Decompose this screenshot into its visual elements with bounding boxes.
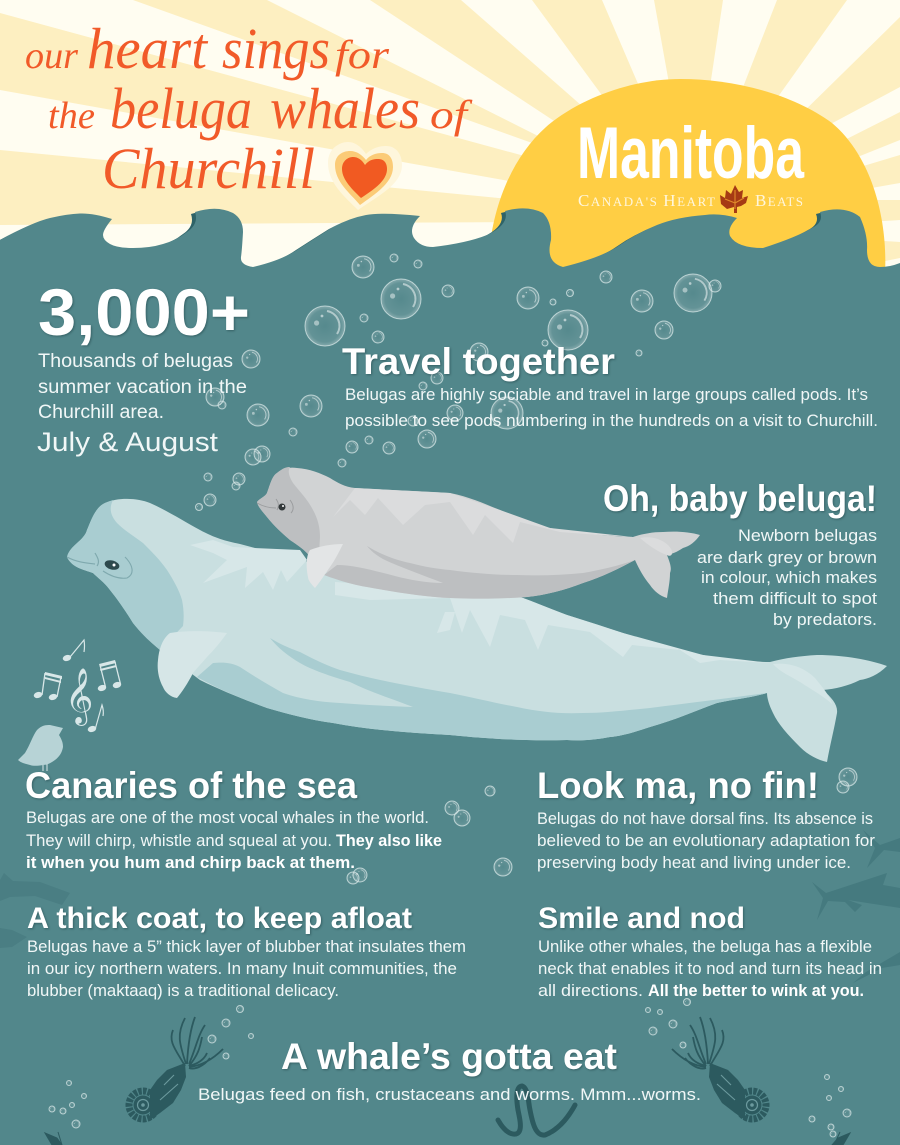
note: left beamed: [33, 672, 62, 701]
stat: 3,000+: [37, 275, 250, 457]
icon: music notes: [33, 640, 122, 733]
whale face: [67, 553, 132, 578]
section: oh, baby beluga: by predators.: [773, 610, 877, 629]
adult beluga whale: [67, 499, 887, 762]
section: smile and nod: Smile and nod: [538, 902, 745, 935]
title: the: [48, 95, 95, 137]
note: top: [62, 640, 84, 662]
whale flipper: [158, 631, 227, 698]
logo tagline: [578, 191, 803, 210]
background sunburst: [0, 0, 900, 310]
sun: [488, 79, 885, 275]
icon: left ammonite: [129, 1017, 223, 1120]
stat: 3,000+: July & August: [37, 427, 219, 457]
stat: 3,000+: Thousands of belugas: [38, 351, 233, 372]
section: look ma, no fin: believed to be an evolutionary adaptation for: [537, 831, 875, 850]
baby flipper: [307, 544, 343, 588]
section: a whale's gotta eat: [198, 1036, 701, 1104]
section: smile and nod: all directions.: [538, 981, 643, 1000]
title: Churchill: [102, 136, 315, 201]
stat: 3,000+: summer vacation in the: [38, 377, 247, 398]
section: canaries of the sea: [25, 765, 442, 872]
logo tagline: BEATS: [755, 191, 803, 210]
section: a whale's gotta eat: A whale’s gotta eat: [281, 1036, 617, 1077]
section: canaries of the sea: Belugas are one of the most vocal whales in the world.: [26, 808, 429, 827]
title: whales: [270, 76, 420, 141]
section: smile and nod: [538, 902, 882, 1000]
section: travel together: Belugas are highly sociable and travel in large groups called pods. It’s: [345, 385, 868, 404]
stat: 3,000+: 3,000+: [38, 275, 250, 349]
icon: worm: [498, 1086, 575, 1135]
section: canaries of the sea: Canaries of the sea: [25, 765, 357, 806]
section: look ma, no fin: [537, 765, 875, 872]
section: oh, baby beluga: them difficult to spot: [713, 589, 877, 608]
whale tail highlight: [773, 664, 832, 704]
section: canaries of the sea: They also like: [336, 831, 442, 850]
section: a whale's gotta eat: Belugas feed on fish, crustaceans and worms. Mmm...worms.: [198, 1085, 701, 1104]
note: low: [87, 705, 103, 733]
section: canaries of the sea: it when you hum and chirp back at them.: [26, 853, 355, 872]
section: smile and nod: neck that enables it to nod and turn its head in: [538, 959, 882, 978]
section: a thick coat: in our icy northern waters. In many Inuit communities, the: [27, 959, 457, 978]
section: oh, baby beluga: Oh, baby beluga!: [603, 478, 877, 519]
note: right beamed: [97, 660, 122, 692]
baby back markings: [333, 488, 633, 543]
section: canaries of the sea: They will chirp, whistle and squeal at you.: [26, 831, 332, 850]
title: of: [430, 92, 473, 137]
title: sings: [222, 16, 330, 81]
whale darker head and belly shading: [67, 500, 184, 650]
section: a thick coat: A thick coat, to keep afloat: [27, 902, 412, 935]
clef: 𝄞: [65, 668, 93, 726]
icon: bottom shrimp right: [832, 1132, 850, 1145]
title: beluga: [110, 76, 252, 141]
baby tail highlight: [640, 537, 672, 556]
section: look ma, no fin: Look ma, no fin!: [537, 765, 819, 806]
section: look ma, no fin: Belugas do not have dorsal fins. Its absence is: [537, 809, 873, 828]
section: a thick coat: [27, 902, 466, 1000]
title: heart: [87, 16, 209, 81]
whale back markings: [190, 540, 770, 663]
section: a thick coat: Belugas have a 5” thick layer of blubber that insulates them: [27, 937, 466, 956]
section: smile and nod: Unlike other whales, the beluga has a flexible: [538, 937, 872, 956]
baby beluga whale: [257, 467, 700, 599]
fish silhouettes: [0, 830, 900, 983]
section: a thick coat: blubber (maktaaq) is a traditional delicacy.: [27, 981, 339, 1000]
icon: bottom shrimp left: [45, 1132, 62, 1145]
icon: heart: [328, 142, 402, 210]
section: oh, baby beluga: in colour, which makes: [701, 568, 877, 587]
section: travel together: possible to see pods numbering in the hundreds on a visit to Churchill.: [345, 411, 878, 430]
section: oh, baby beluga: are dark grey or brown: [697, 548, 877, 567]
title: our: [25, 35, 78, 77]
icon: bird: [18, 725, 63, 771]
section: smile and nod: All the better to wink at you.: [648, 981, 864, 1000]
title: for: [335, 32, 389, 77]
icon: maple leaf: [720, 185, 748, 213]
bubbles: [49, 254, 857, 1137]
section: travel together: [342, 341, 878, 430]
section: look ma, no fin: preserving body heat and living under ice.: [537, 853, 851, 872]
stat: 3,000+: Churchill area.: [38, 402, 164, 423]
section: oh, baby beluga: Newborn belugas: [738, 526, 877, 545]
section: oh, baby beluga: [603, 478, 877, 629]
title: [25, 16, 473, 201]
logo: Manitoba: [577, 113, 805, 213]
baby face: [257, 499, 293, 513]
section: travel together: Travel together: [342, 341, 615, 382]
logo: Manitoba: Manitoba: [577, 113, 805, 194]
baby darker head and belly shading: [257, 467, 320, 570]
logo tagline: CANADA'S HEART: [578, 191, 715, 210]
icon: right ammonite: [672, 1017, 766, 1120]
